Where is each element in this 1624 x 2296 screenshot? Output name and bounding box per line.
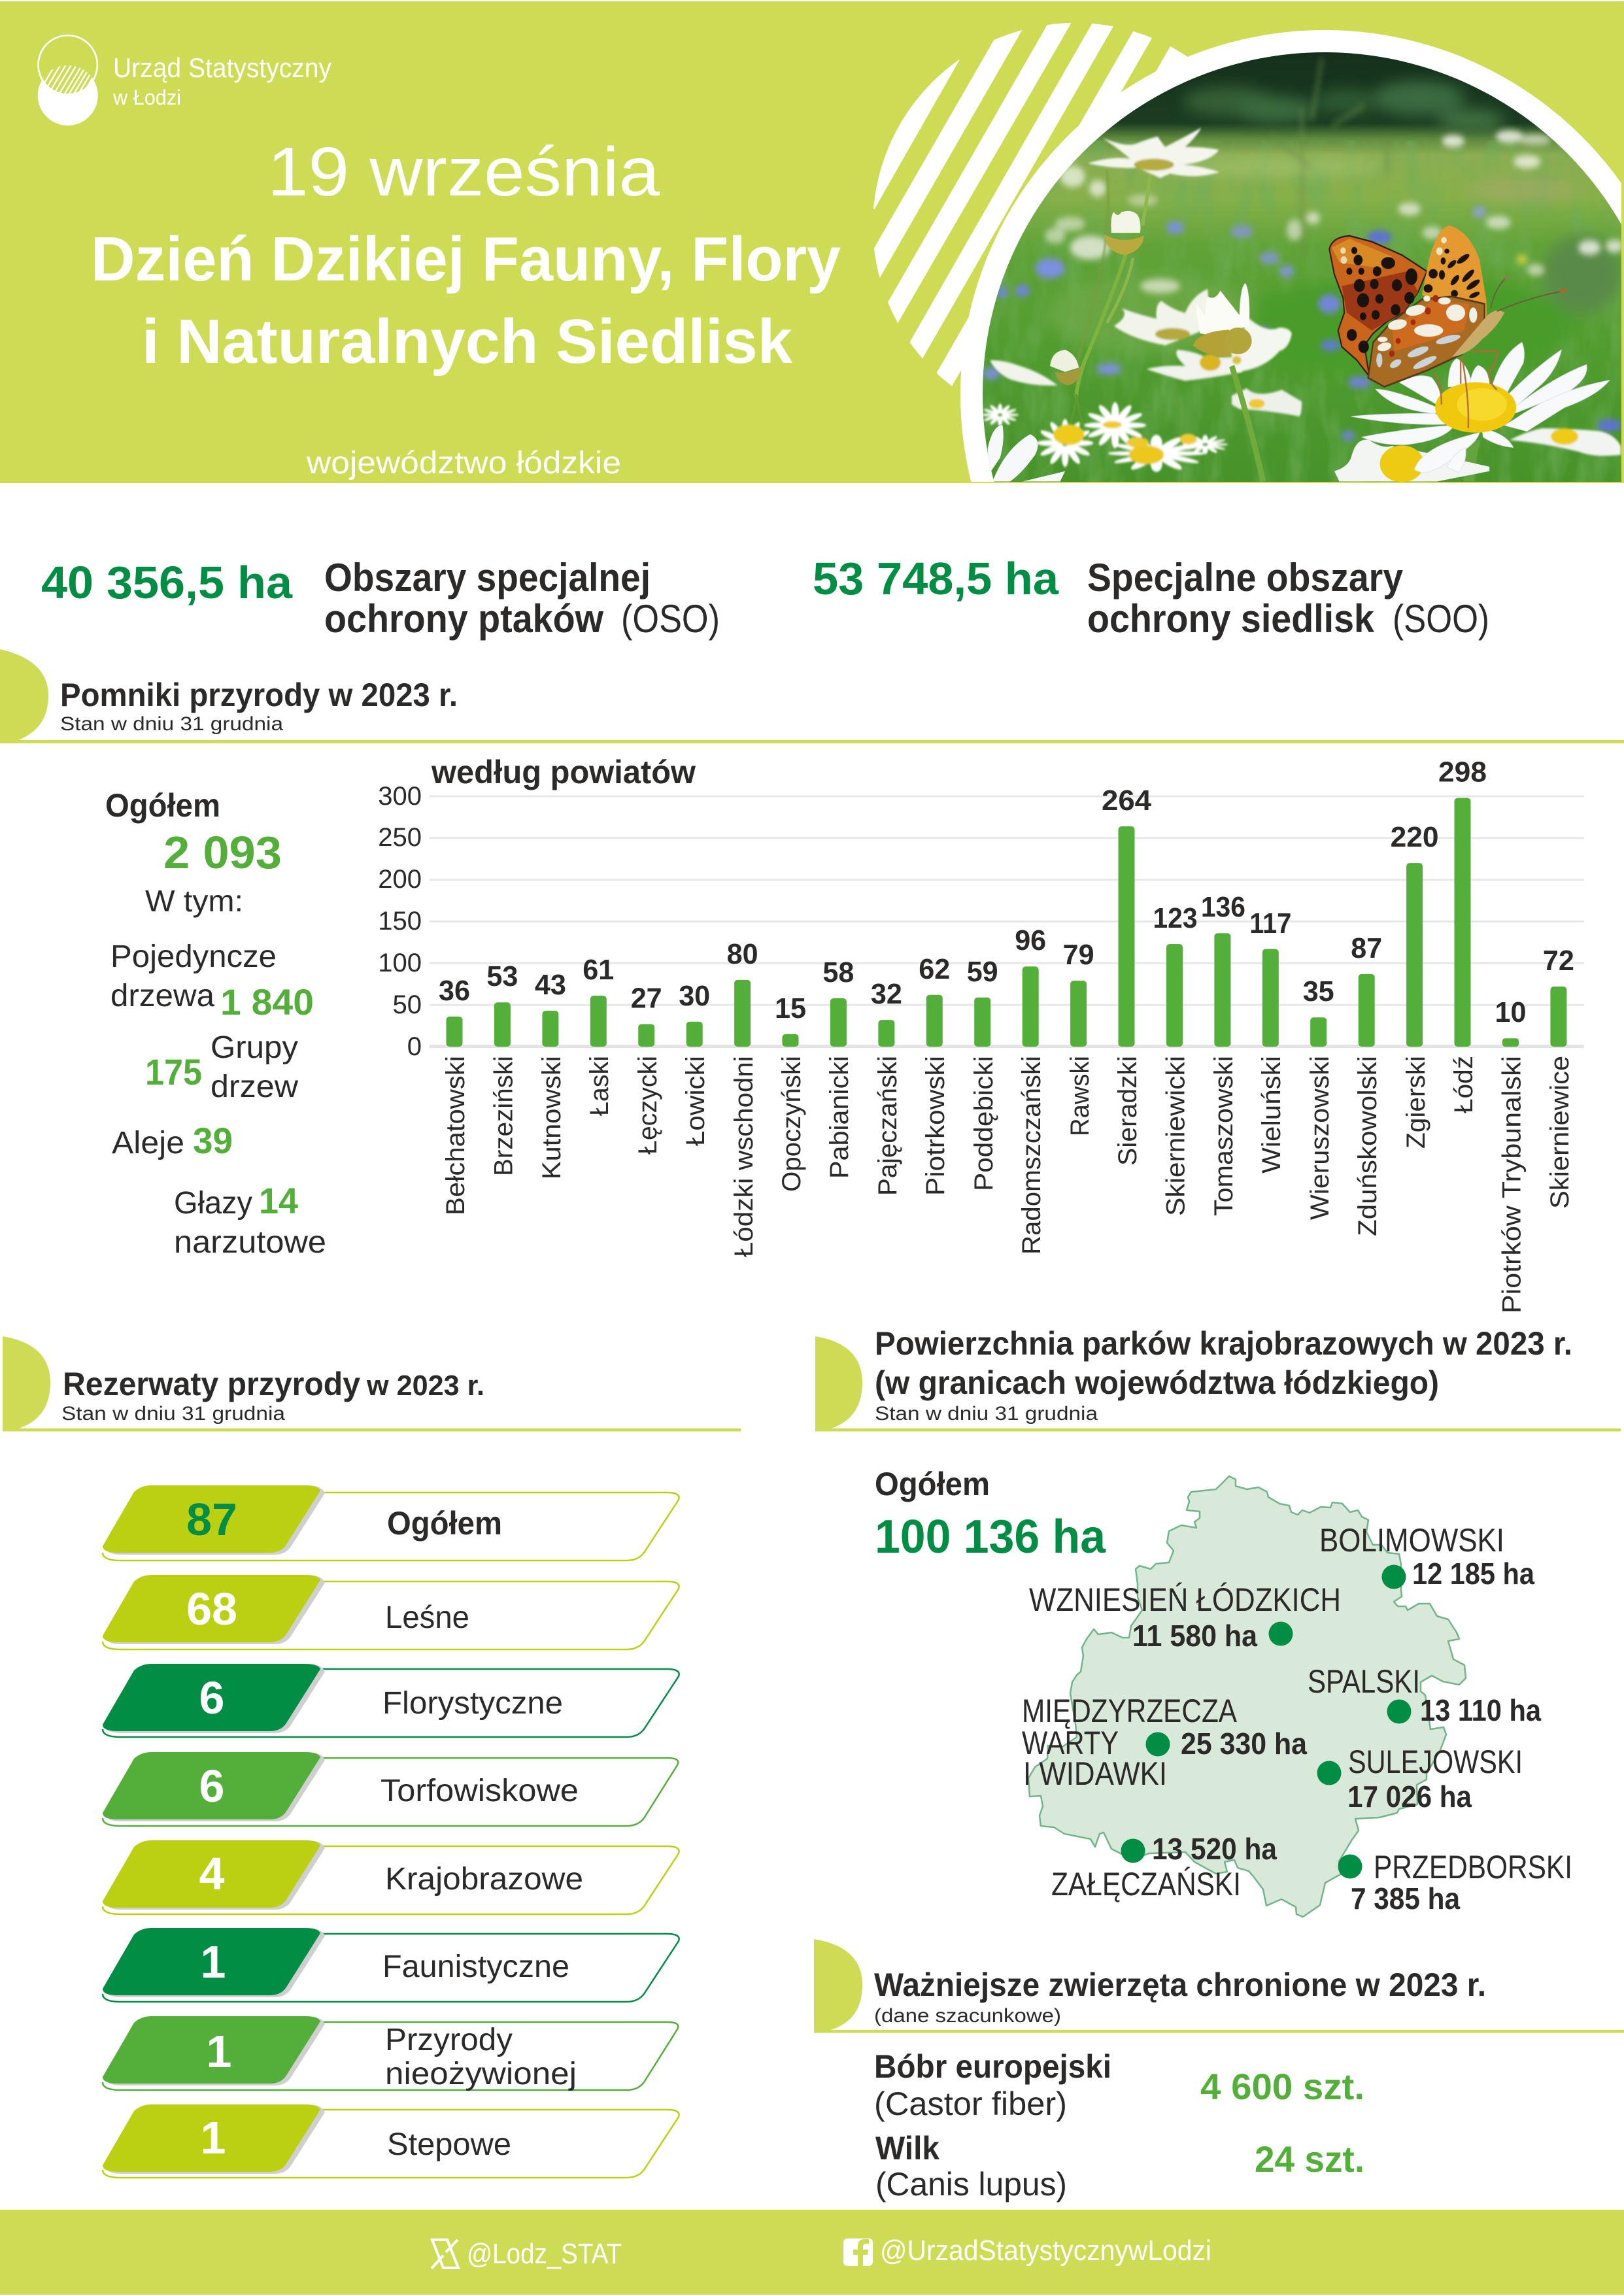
- footer bar: [0, 2210, 1624, 2295]
- park: Międzyrzecza Warty i Widawki: 25 330 ha: [1181, 1727, 1307, 1761]
- front wing lower: [1368, 296, 1485, 387]
- y axis labels: 50: [392, 990, 422, 1019]
- county labels: Sieradzki: [1113, 1056, 1142, 1166]
- panel heading: landscape parks area: Powierzchnia parków krajobrazowych w 2023 r.: [875, 1325, 1572, 1362]
- landscape parks total: 100 136 ha: [875, 1511, 1106, 1563]
- bars: [446, 798, 1566, 1047]
- county labels: Łódź: [1449, 1056, 1478, 1113]
- protected animal: beaver: 4 600 szt.: [1200, 2066, 1364, 2107]
- reserve row: steppe 1: [103, 2104, 679, 2178]
- protected animal: wolf: 24 szt.: [1255, 2138, 1364, 2180]
- county labels: Opoczyński: [777, 1056, 806, 1192]
- middle daisy: [1114, 289, 1210, 345]
- value labels: 79: [1063, 939, 1094, 971]
- Facebook handle: @UrzadStatystycznywLodzi: [880, 2235, 1211, 2267]
- y axis labels: 250: [378, 823, 422, 852]
- reserve row: forest 68: 68: [186, 1583, 237, 1634]
- value labels: 136: [1201, 891, 1245, 923]
- panel: monuments totals: Grupy: [211, 1030, 298, 1065]
- park: Wzniesień Łódzkich: [1029, 1581, 1341, 1653]
- park: Międzyrzecza Warty i Widawki: WARTY: [1022, 1725, 1119, 1761]
- bar chart: monuments by county: [378, 754, 1584, 1313]
- value labels: 117: [1249, 907, 1291, 939]
- value labels: 62: [919, 953, 950, 985]
- county labels: Pajęczański: [873, 1056, 902, 1196]
- landscape parks total: Ogółem: [875, 1466, 990, 1502]
- panel: nature reserves list: [103, 1485, 679, 2178]
- stat: special bird protection areas: [41, 556, 720, 641]
- stat: special habitat protection areas: [813, 553, 1489, 641]
- value labels: 58: [822, 956, 854, 988]
- stat: special bird protection areas: ochrony ptaków: [324, 597, 603, 641]
- panel: monuments totals: 39: [193, 1120, 233, 1161]
- county labels: Łęczycki: [634, 1056, 662, 1155]
- reserve row: total 87: Ogółem: [387, 1505, 502, 1542]
- county labels: Bełchatowski: [441, 1056, 470, 1215]
- small buds: [1050, 211, 1144, 385]
- reserve row: steppe 1: 1: [201, 2112, 226, 2163]
- reserve row: landscape 4: Krajobrazowe: [385, 1862, 583, 1897]
- y axis labels: 300: [378, 782, 422, 811]
- reserve row: inanimate nature 1: 1: [207, 2026, 231, 2077]
- county labels: Wieruszowski: [1306, 1056, 1334, 1220]
- panel heading: protected animals: (dane szacunkowe): [874, 2005, 1061, 2027]
- photo: butterfly on daisies in a meadow: [960, 30, 1621, 482]
- protected animal: beaver: Bóbr europejski: [874, 2048, 1111, 2085]
- stat: special habitat protection areas: (SOO): [1393, 597, 1489, 641]
- logo: Urząd Statystyczny w Łodzi: [35, 35, 331, 126]
- reserve row: landscape 4: 4: [199, 1848, 225, 1899]
- park: Międzyrzecza Warty i Widawki: MIĘDZYRZECZA: [1022, 1693, 1238, 1729]
- county labels: Tomaszowski: [1210, 1056, 1238, 1216]
- value labels: 10: [1495, 996, 1526, 1028]
- panel: monuments totals: [105, 787, 326, 1260]
- county labels: Zgierski: [1402, 1056, 1430, 1149]
- county labels: Skierniewicki: [1161, 1056, 1190, 1216]
- big bud: [1193, 290, 1250, 357]
- region label: województwo łódzkie: [306, 446, 621, 481]
- panel: monuments totals: Ogółem: [105, 787, 220, 824]
- value labels: 32: [871, 978, 902, 1010]
- protected animal: wolf: Wilk: [875, 2130, 939, 2167]
- title: Dzień Dzikiej Fauny, Flory: [91, 224, 841, 294]
- reserve row: faunistic 1: 1: [201, 1936, 226, 1987]
- reserve row: faunistic 1: Faunistyczne: [382, 1950, 569, 1984]
- county labels: Wieluński: [1257, 1056, 1286, 1173]
- panel heading: nature reserves: Rezerwaty przyrody: [63, 1366, 360, 1402]
- y axis labels: 100: [378, 949, 422, 977]
- map: Łódź voivodeship with landscape parks: [1022, 1476, 1572, 1917]
- county labels: Skierniewice: [1546, 1056, 1574, 1209]
- chart title: według powiatów: [431, 754, 696, 790]
- blurred right daisy: [1146, 350, 1242, 381]
- reserve row: landscape 4: [103, 1840, 679, 1914]
- park: Bolimowski: BOLIMOWSKI: [1319, 1522, 1504, 1559]
- main daisy petals: [1351, 343, 1610, 473]
- park: Sulejowski: SULEJOWSKI: [1348, 1744, 1523, 1780]
- reserve row: total 87: [103, 1485, 679, 1561]
- county labels: [441, 1056, 1574, 1313]
- park: Przedborski: [1338, 1849, 1572, 1916]
- panel heading: protected animals: Ważniejsze zwierzęta chronione w 2023 r.: [874, 1967, 1486, 2003]
- stem left: [1232, 366, 1263, 482]
- value labels: 43: [535, 969, 566, 1001]
- value labels: 87: [1351, 932, 1382, 964]
- park: Załęczański: 13 520 ha: [1152, 1832, 1277, 1866]
- park: Sulejowski: [1317, 1744, 1523, 1814]
- reserve row: peat 6: 6: [199, 1761, 224, 1812]
- park: Międzyrzecza Warty i Widawki: I WIDAWKI: [1023, 1755, 1167, 1792]
- small blurred daisies right: [1232, 318, 1621, 456]
- butterfly: [1329, 226, 1567, 428]
- park: Wzniesień Łódzkich: 11 580 ha: [1132, 1619, 1257, 1653]
- reserve row: peat 6: Torfowiskowe: [381, 1774, 579, 1808]
- value labels: 61: [583, 954, 614, 986]
- reserve row: floristic 6: 6: [199, 1672, 224, 1723]
- park: Spalski: [1308, 1663, 1541, 1727]
- panel heading: natural monuments: Pomniki przyrody w 2023 r.: [60, 677, 458, 713]
- stat: special habitat protection areas: ochrony siedlisk: [1087, 597, 1375, 641]
- panel: monuments totals: 14: [259, 1180, 298, 1221]
- reserve row: faunistic 1: [103, 1928, 679, 2002]
- reserve row: forest 68: Leśne: [385, 1600, 469, 1635]
- value labels: 15: [775, 992, 806, 1024]
- value labels: 35: [1303, 975, 1334, 1007]
- left part of photo: [981, 127, 1250, 482]
- park: Bolimowski: 12 185 ha: [1412, 1557, 1534, 1591]
- park: Załęczański: ZAŁĘCZAŃSKI: [1051, 1866, 1241, 1902]
- panel heading: nature reserves: [3, 1336, 741, 1432]
- reserve row: inanimate nature 1: [103, 2016, 678, 2091]
- panel heading: landscape parks area: Stan w dniu 31 grudnia: [875, 1403, 1098, 1425]
- panel: monuments totals: drzewa: [110, 979, 214, 1013]
- protected animal: wolf: [875, 2130, 1364, 2203]
- title: i Naturalnych Siedlisk: [142, 307, 793, 377]
- county labels: Łódzki wschodni: [730, 1056, 758, 1257]
- panel heading: nature reserves: w 2023 r.: [366, 1370, 484, 1402]
- stat: special bird protection areas: Obszary specjalnej: [324, 556, 651, 599]
- lower daisies: [1037, 402, 1228, 472]
- park: Przedborski: PRZEDBORSKI: [1374, 1849, 1572, 1885]
- park: Załęczański: [1051, 1832, 1277, 1902]
- value labels: 220: [1391, 821, 1439, 853]
- value labels: 123: [1153, 902, 1198, 934]
- value labels: 53: [486, 960, 518, 992]
- top blurred daisy: [1088, 127, 1220, 178]
- panel: monuments totals: W tym:: [145, 884, 243, 918]
- park: Wzniesień Łódzkich: WZNIESIEŃ ŁÓDZKICH: [1029, 1581, 1341, 1618]
- icon: Facebook: [843, 2238, 873, 2266]
- panel heading: protected animals: [814, 1939, 1624, 2033]
- reserve row: floristic 6: [103, 1664, 679, 1737]
- y axis labels: 0: [407, 1032, 422, 1061]
- reserve row: floristic 6: Florystyczne: [382, 1686, 563, 1721]
- right part of photo: [1225, 58, 1623, 482]
- reserve row: peat 6: [103, 1752, 678, 1826]
- park: Międzyrzecza Warty i Widawki: [1022, 1693, 1307, 1792]
- y axis labels: [378, 782, 422, 1061]
- header banner: [0, 1, 1624, 483]
- panel heading: landscape parks area: (w granicach województwa łódzkiego): [875, 1364, 1439, 1401]
- stat: special bird protection areas: 40 356,5 ha: [41, 557, 293, 608]
- map outline: [1028, 1476, 1466, 1917]
- county labels: Radomszczański: [1017, 1056, 1046, 1255]
- panel: monuments totals: Głazy: [174, 1186, 252, 1221]
- park: Sulejowski: 17 026 ha: [1347, 1780, 1472, 1814]
- county labels: Zduńskowolski: [1353, 1056, 1382, 1236]
- county labels: Piotrkowski: [921, 1056, 950, 1196]
- icon: X: [431, 2240, 458, 2269]
- park: Spalski: SPALSKI: [1308, 1663, 1420, 1700]
- county labels: Poddębicki: [970, 1056, 998, 1191]
- value labels: 264: [1102, 785, 1152, 817]
- stat: special habitat protection areas: Specjalne obszary: [1087, 556, 1404, 599]
- panel: monuments totals: narzutowe: [174, 1225, 326, 1260]
- left blur daisy: [981, 360, 1058, 426]
- park: Przedborski: 7 385 ha: [1351, 1882, 1460, 1916]
- title: 19 września: [267, 133, 660, 211]
- reserve row: forest 68: [103, 1575, 679, 1649]
- panel heading: natural monuments: [0, 649, 1624, 743]
- y axis labels: 150: [378, 907, 422, 936]
- value labels: 27: [631, 982, 662, 1015]
- white bud left: [1229, 283, 1249, 333]
- X handle: @Lodz_STAT: [467, 2238, 622, 2270]
- stat: special habitat protection areas: 53 748,5 ha: [813, 553, 1059, 604]
- value labels: 80: [727, 938, 758, 970]
- lower yellow daisy: [1334, 439, 1489, 482]
- protected animal: beaver: (Castor fiber): [874, 2085, 1067, 2122]
- reserve row: total 87: 87: [186, 1494, 237, 1545]
- front wing upper: [1422, 226, 1487, 322]
- value labels: 298: [1438, 756, 1487, 788]
- logo: Urząd Statystyczny w Łodzi: Urząd Statystyczny: [113, 52, 331, 83]
- county labels: Łaski: [585, 1056, 614, 1116]
- landscape parks total: [875, 1466, 1106, 1563]
- value labels: 96: [1015, 924, 1046, 956]
- body and antennae: [1452, 311, 1504, 357]
- reserve row: inanimate nature 1: nieożywionej: [385, 2057, 577, 2091]
- panel: monuments totals: 175: [145, 1051, 202, 1092]
- bottom-left petals: [987, 425, 1065, 482]
- stat: special bird protection areas: (OSO): [621, 597, 720, 641]
- y axis labels: 200: [378, 865, 422, 894]
- stem of main daisy: [1463, 440, 1481, 482]
- county labels: Piotrków Trybunalski: [1497, 1056, 1526, 1313]
- county labels: Brzeziński: [489, 1056, 518, 1176]
- value labels: 72: [1543, 945, 1574, 977]
- panel: monuments totals: Aleje: [112, 1126, 184, 1160]
- park: Bolimowski: [1319, 1522, 1534, 1591]
- county labels: Kutnowski: [537, 1056, 566, 1179]
- county labels: Rawski: [1066, 1056, 1094, 1136]
- panel: monuments totals: 1 840: [220, 981, 314, 1022]
- panel heading: nature reserves: Stan w dniu 31 grudnia: [61, 1403, 285, 1425]
- panel: monuments totals: Pojedyncze: [110, 939, 277, 974]
- value labels: 59: [967, 956, 998, 988]
- value labels: 36: [439, 975, 470, 1007]
- logo: Urząd Statystyczny w Łodzi: w Łodzi: [112, 86, 181, 109]
- panel: monuments totals: drzew: [211, 1070, 298, 1104]
- title: [91, 133, 841, 377]
- reserve row: inanimate nature 1: Przyrody: [385, 2023, 513, 2057]
- reserve row: steppe 1: Stepowe: [387, 2127, 511, 2162]
- panel heading: landscape parks area: [815, 1325, 1621, 1432]
- main daisy centre: [1435, 382, 1516, 433]
- value labels: [439, 756, 1574, 1028]
- park: Spalski: 13 110 ha: [1420, 1693, 1541, 1727]
- panel heading: natural monuments: Stan w dniu 31 grudnia: [60, 713, 283, 735]
- protected animal: beaver: [874, 2048, 1364, 2122]
- panel: monuments totals: 2 093: [163, 827, 282, 878]
- value labels: 30: [679, 980, 710, 1012]
- county labels: Pabianicki: [825, 1056, 854, 1179]
- county labels: Łowicki: [681, 1056, 710, 1146]
- decorative striped circle: [873, 23, 1188, 386]
- protected animal: wolf: (Canis lupus): [875, 2166, 1067, 2203]
